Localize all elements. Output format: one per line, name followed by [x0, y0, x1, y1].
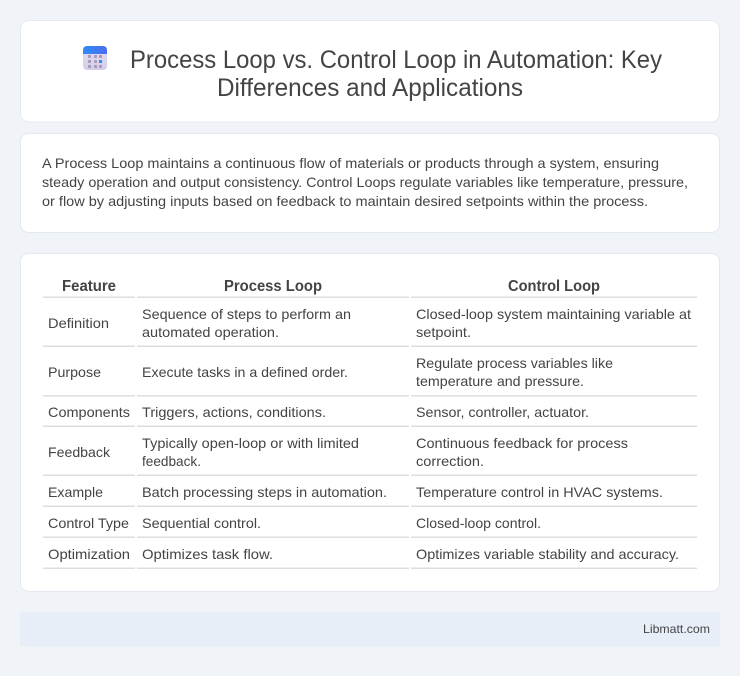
row: Control Type: Closed-loop control. — [416, 515, 541, 531]
row: Definition: Sequence of steps to perform an — [142, 306, 351, 322]
row: Example: Batch processing steps in automation. — [142, 484, 387, 500]
row: Definition: Definition — [48, 315, 109, 331]
row: Feedback: Typically open-loop or with limited — [142, 435, 359, 451]
icon: calendar grid — [83, 46, 107, 70]
row: Purpose: Regulate process variables like — [416, 355, 613, 371]
row: Feedback: feedback. — [142, 453, 201, 469]
row: Feedback — [48, 435, 628, 469]
panel: title — [20, 20, 720, 122]
heading: Differences and Applications — [217, 74, 523, 102]
row: Definition: setpoint. — [416, 324, 471, 340]
row: Example — [48, 484, 663, 500]
row: Optimization: Optimization — [48, 546, 130, 562]
row: Purpose: temperature and pressure. — [416, 373, 584, 389]
row: Feedback: correction. — [416, 453, 484, 469]
row: Purpose: Execute tasks in a defined order. — [142, 364, 348, 380]
row: Control Type: Control Type — [48, 515, 129, 531]
row: Definition: automated operation. — [142, 324, 279, 340]
heading: Process Loop vs. Control Loop in Automation: Key — [130, 46, 662, 74]
footer: Libmatt.com — [643, 622, 710, 636]
row: Control Type: Sequential control. — [142, 515, 261, 531]
panel: intro text: steady operation and output consistency. Control Loops regulate variables like temperature, pressure, — [42, 174, 688, 190]
footer — [20, 612, 720, 646]
row: Purpose: Purpose — [48, 364, 101, 380]
panel: comparison table — [20, 254, 720, 592]
row: Example: Temperature control in HVAC systems. — [416, 484, 663, 500]
row: Control Type — [48, 515, 541, 531]
row: Optimization — [48, 546, 679, 562]
row: Feedback: Feedback — [48, 444, 111, 460]
row: Feedback: Continuous feedback for process — [416, 435, 628, 451]
row: Optimization: Optimizes task flow. — [142, 546, 273, 562]
panel: intro text: A Process Loop maintains a continuous flow of materials or products through a system, ensuring — [42, 155, 659, 171]
table header — [62, 278, 600, 295]
row: Definition — [48, 306, 691, 340]
panel: intro text: or flow by adjusting inputs based on feedback to maintain desired setpoints within the process. — [42, 193, 648, 209]
table header: Feature — [62, 278, 116, 295]
row: Optimization: Optimizes variable stability and accuracy. — [416, 546, 679, 562]
row: Components: Components — [48, 404, 130, 420]
row: Purpose — [48, 355, 613, 389]
table header: Process Loop — [224, 278, 322, 295]
row: Example: Example — [48, 484, 103, 500]
table header: Control Loop — [508, 278, 600, 295]
panel: intro text — [20, 134, 720, 232]
row: Components — [48, 404, 589, 420]
row: Components: Triggers, actions, conditions. — [142, 404, 326, 420]
row: Definition: Closed-loop system maintaining variable at — [416, 306, 691, 322]
heading — [130, 46, 662, 102]
row: Components: Sensor, controller, actuator. — [416, 404, 589, 420]
